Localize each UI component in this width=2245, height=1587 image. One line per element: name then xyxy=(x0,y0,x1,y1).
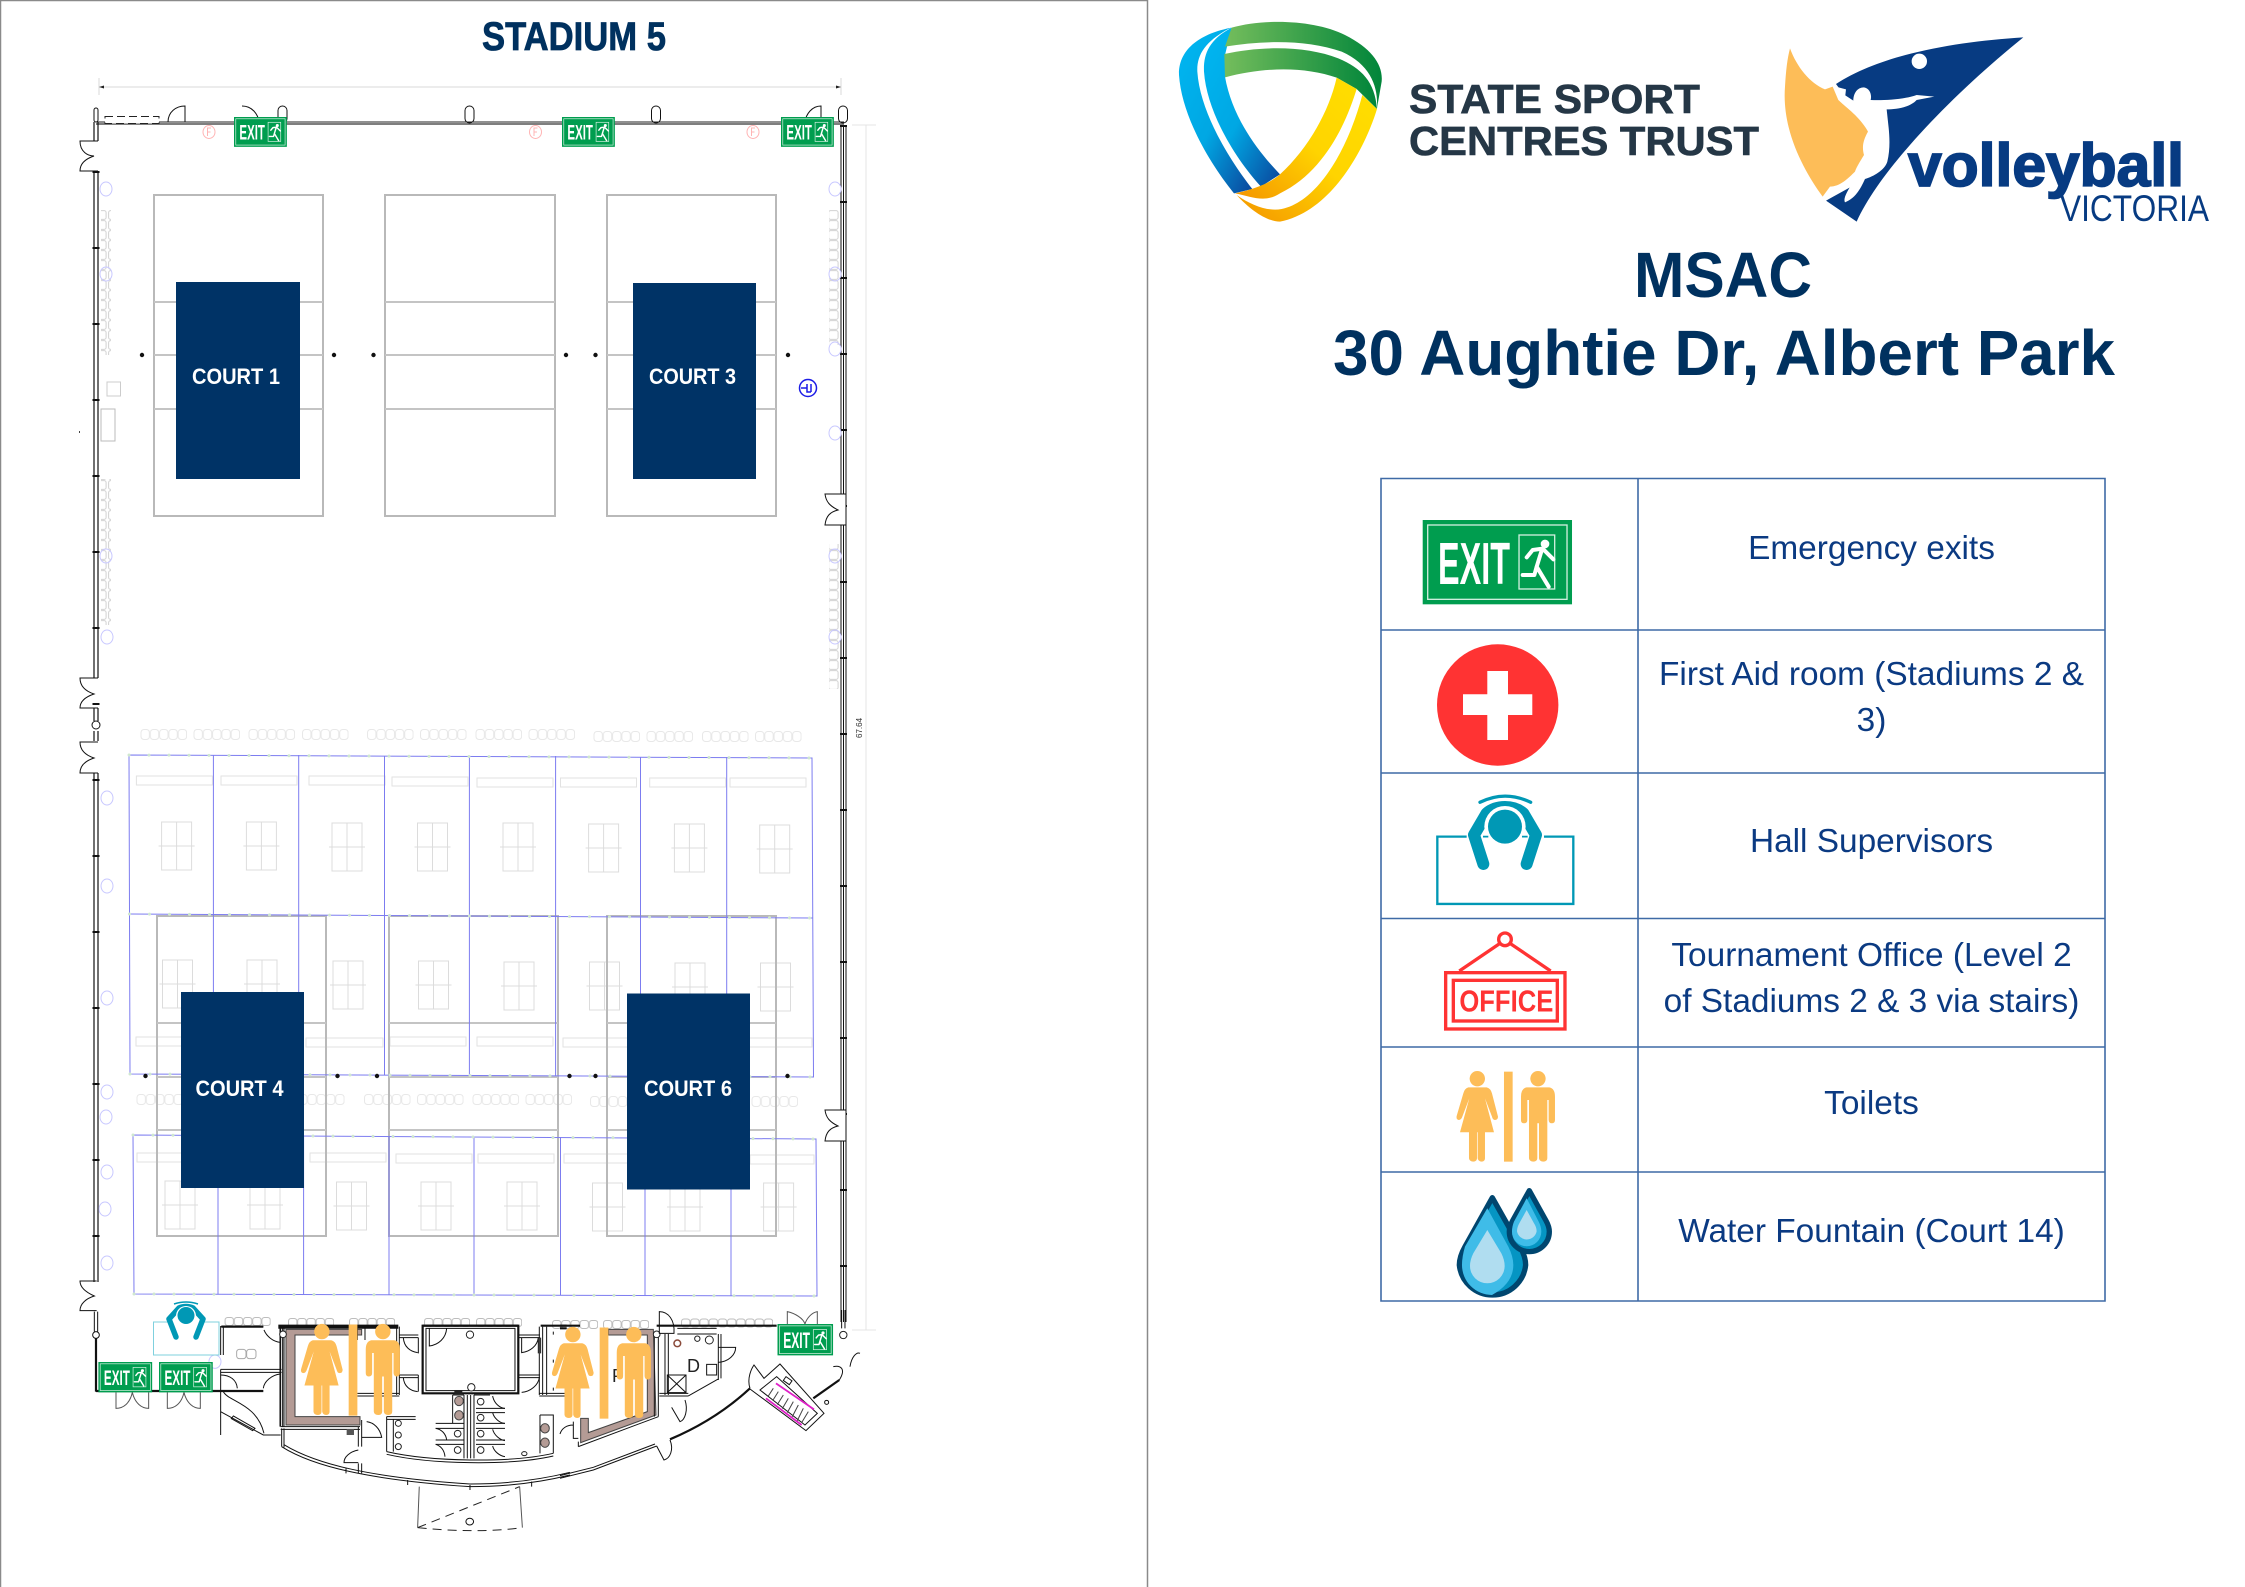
posts: lower xyxy=(143,1074,790,1078)
icon: water drops xyxy=(1459,1191,1549,1295)
legend text: tournament office: of Stadiums 2 & 3 via stairs) xyxy=(1664,983,2079,1020)
exit sign: south west one: EXIT xyxy=(104,1366,130,1390)
wall markers xyxy=(99,182,841,1270)
court block: Court 6: COURT 6 xyxy=(644,1076,732,1101)
court block: Court 4: COURT 4 xyxy=(196,1076,284,1101)
exit sign: north west xyxy=(234,117,287,147)
logo: State Sport Centres Trust emblem xyxy=(1179,22,1382,222)
court block: Court 3: COURT 3 xyxy=(649,364,736,389)
heading: venue name and address: MSAC xyxy=(1634,239,1812,311)
floor plan: dashed canopy xyxy=(418,1487,522,1531)
court block: Court 1 xyxy=(176,282,300,479)
room letters on plan: D xyxy=(687,1356,700,1376)
blue court grid xyxy=(129,755,817,1296)
legend text: tournament office: Tournament Office (Level 2 xyxy=(1671,937,2072,974)
floor plan: building walls and dimensions: 67.64 xyxy=(855,717,864,738)
exit sign: north east xyxy=(781,117,834,147)
heading: venue name and address xyxy=(1333,239,2115,389)
courts: upper outlines xyxy=(154,195,776,516)
exit sign: north centre xyxy=(562,117,615,147)
heading: venue name and address: 30 Aughtie Dr, Albert Park xyxy=(1333,317,2115,389)
posts: upper xyxy=(140,353,790,357)
icon: exit sign: EXIT xyxy=(1438,530,1510,597)
icon: blue outlet xyxy=(800,380,816,396)
icon: office sign xyxy=(1446,933,1565,1029)
legend text: first aid: 3) xyxy=(1857,702,1886,739)
icon: office sign: OFFICE xyxy=(1459,985,1553,1019)
icon: first aid xyxy=(1437,644,1558,766)
exit sign: south west two xyxy=(159,1362,213,1392)
legend text: hall supervisors: Hall Supervisors xyxy=(1750,823,1993,860)
icon: toilets east xyxy=(552,1327,651,1419)
seats along side walls xyxy=(101,210,839,689)
icon: toilets xyxy=(1457,1071,1555,1162)
legend text: toilets: Toilets xyxy=(1824,1085,1919,1122)
icon: hall supervisor on plan xyxy=(154,1302,219,1355)
exit sign: south west one xyxy=(98,1362,152,1392)
exit sign: north west: EXIT xyxy=(239,122,265,145)
floor plan: west entry rooms xyxy=(80,1281,283,1435)
court block: Court 1: COURT 1 xyxy=(192,364,280,389)
chair rows xyxy=(136,729,802,1107)
fire markers xyxy=(203,126,759,138)
courts: lower outlines xyxy=(157,916,776,1236)
floor plan: building walls and dimensions xyxy=(79,78,876,1330)
logo: Volleyball Victoria: volleyball xyxy=(1908,132,2184,199)
floor plan: east rooms and stair xyxy=(560,1310,860,1478)
logo: Volleyball Victoria xyxy=(1785,37,2209,229)
logo: Volleyball Victoria: VICTORIA xyxy=(2060,188,2209,229)
court block: Court 6 xyxy=(627,994,750,1190)
seats along the south wall xyxy=(225,1317,773,1330)
room letters on plan xyxy=(612,1356,700,1386)
exit sign: north centre: EXIT xyxy=(567,122,593,145)
exit sign: south west two: EXIT xyxy=(165,1366,190,1390)
legend text: first aid: First Aid room (Stadiums 2 & xyxy=(1659,656,2084,693)
legend table xyxy=(1381,478,2105,1301)
logo text: State Sport Centres Trust xyxy=(1409,76,1759,164)
exit sign: south east: EXIT xyxy=(783,1328,810,1353)
floor plan: toilets and stalls block xyxy=(278,1326,570,1490)
legend text: emergency exits: Emergency exits xyxy=(1748,530,1995,567)
court block: Court 4 xyxy=(181,992,304,1188)
logo text: State Sport Centres Trust: STATE SPORT xyxy=(1409,76,1700,122)
exit sign: north east: EXIT xyxy=(786,122,812,145)
tables and windows in the court grid xyxy=(136,776,814,1231)
panel: stadium floor plan frame xyxy=(0,0,1148,1587)
court block: Court 3 xyxy=(633,283,756,479)
icon: hall supervisor xyxy=(1437,796,1573,904)
table grid xyxy=(1381,478,2105,1301)
icon: toilets west xyxy=(301,1324,400,1416)
logo text: State Sport Centres Trust: CENTRES TRUST xyxy=(1409,118,1759,164)
legend text: water fountain: Water Fountain (Court 14) xyxy=(1678,1213,2065,1250)
room letters on plan: P xyxy=(612,1366,624,1386)
title: Stadium 5: STADIUM 5 xyxy=(482,15,666,59)
